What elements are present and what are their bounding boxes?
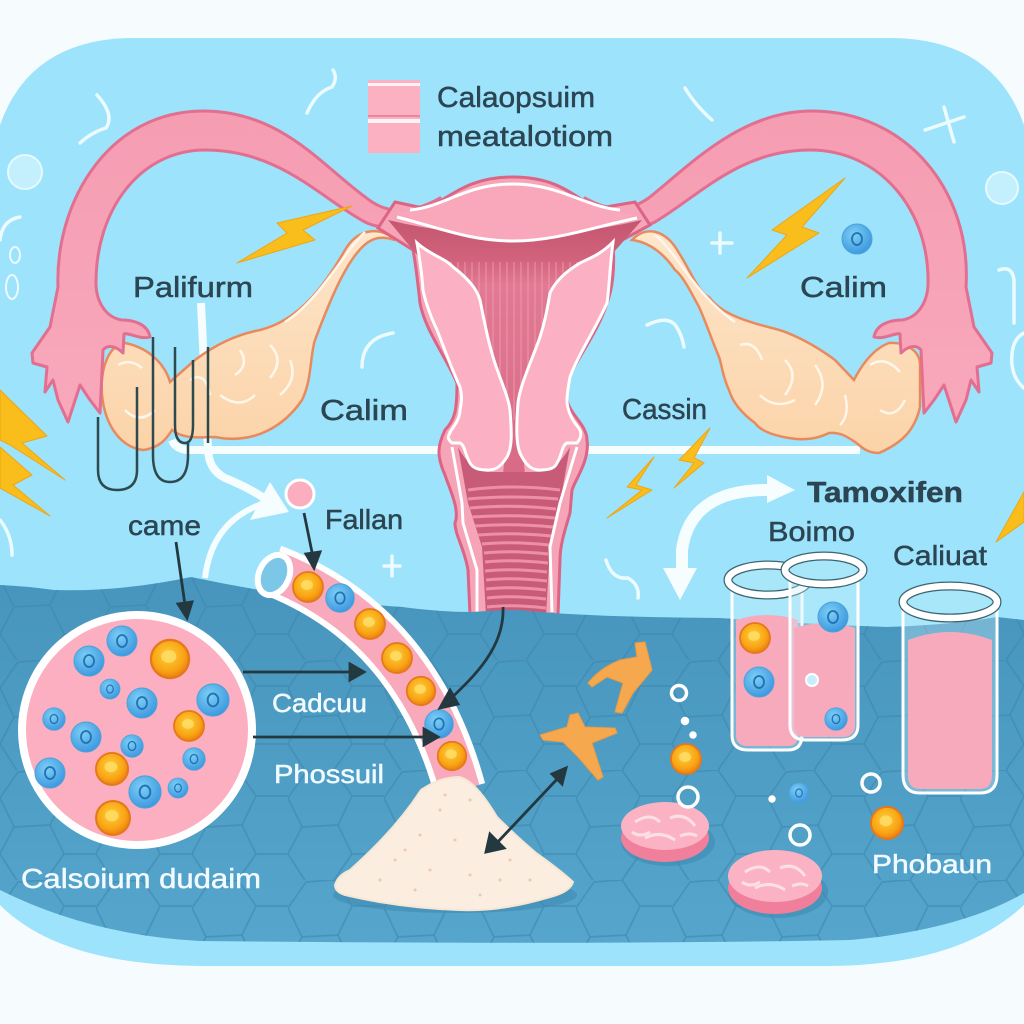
cervix white borders — [452, 447, 577, 612]
left lobe — [417, 243, 511, 470]
powder pile — [333, 777, 577, 913]
right ovary — [632, 231, 920, 453]
label: Cadcuu: Cadcuu — [272, 688, 367, 718]
circle: calcium particles — [22, 615, 252, 845]
uterine cavity — [388, 220, 642, 475]
label: Calsoium dudaim: Calsoium dudaim — [21, 863, 261, 894]
white connector lines — [172, 303, 860, 502]
pink marker ball — [286, 480, 314, 508]
black arrows — [176, 513, 566, 852]
left fallopian tube — [32, 111, 440, 422]
beaker 1 — [728, 565, 808, 750]
curved white arrow — [663, 475, 795, 600]
bubbles — [672, 686, 880, 845]
vessel tube — [252, 550, 466, 790]
label: Calim right: Calim — [800, 272, 887, 304]
lightning bolts — [0, 178, 1024, 542]
label: Tamoxifen: Tamoxifen — [807, 477, 963, 509]
legend: colour swatch — [368, 80, 420, 153]
uterus — [378, 177, 650, 615]
beaker 3 — [903, 586, 997, 793]
label: Caliuat: Caliuat — [893, 540, 987, 571]
right fallopian tube — [585, 111, 992, 422]
label: Calim centre: Calim — [320, 395, 408, 427]
fundus cap — [397, 183, 637, 241]
decorative squiggles — [0, 70, 1024, 598]
label: Phossuil: Phossuil — [274, 759, 384, 789]
clips on left ovary — [98, 337, 208, 490]
panel: tissue layer — [0, 577, 1024, 943]
beakers — [728, 556, 997, 793]
discs — [621, 802, 828, 918]
title: Calaopsuim — [437, 82, 595, 114]
cervical stripes — [468, 487, 560, 608]
label: Came: came — [128, 510, 201, 541]
cervical canal — [458, 447, 570, 615]
label: Palifurm: Palifurm — [133, 272, 253, 304]
uterine silhouette — [378, 177, 650, 615]
title: meatalotiom — [437, 121, 613, 153]
label: Phobaun: Phobaun — [872, 849, 992, 879]
label: Boimo: Boimo — [768, 516, 855, 547]
icon: loose ions — [671, 744, 903, 839]
icon: blue ion top right — [842, 224, 872, 254]
white arrow to vessel — [205, 482, 289, 578]
disc 2 — [728, 850, 828, 918]
disc 1 — [621, 802, 715, 866]
title — [437, 82, 613, 153]
beaker 2 — [785, 556, 863, 740]
label: Fallan: Fallan — [325, 504, 403, 535]
label: Cassin: Cassin — [622, 394, 707, 426]
left ovary — [102, 231, 395, 450]
right lobe — [517, 242, 613, 470]
orange shapes — [540, 642, 652, 780]
